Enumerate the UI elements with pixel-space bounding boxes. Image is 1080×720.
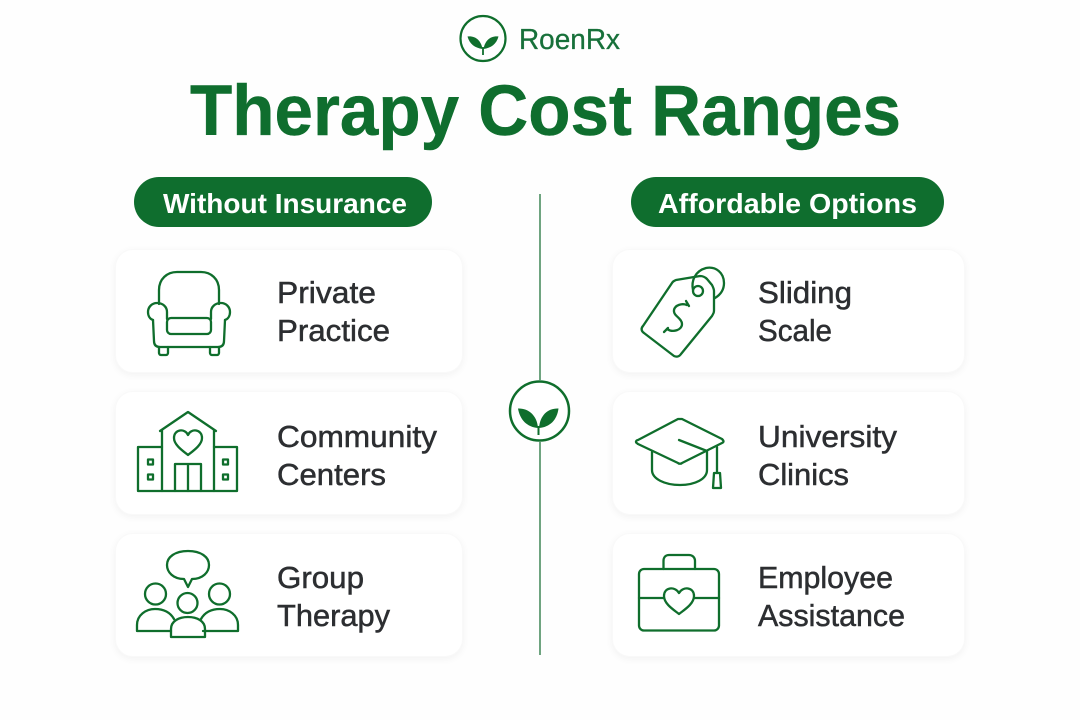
- panel: private practice card: [115, 249, 463, 373]
- panel: group therapy card: [115, 533, 463, 657]
- heading pill: affordable options: [631, 177, 944, 227]
- text: group therapy: Group: [277, 560, 364, 595]
- panel: employee assistance card: [612, 533, 965, 657]
- text: group therapy: Therapy: [277, 598, 390, 633]
- icon: group with speech bubble: [137, 551, 238, 637]
- text: university clinics: University: [758, 419, 897, 454]
- logo: RoenRx: [460, 16, 620, 61]
- text: employee assistance: Assistance: [758, 598, 905, 633]
- heading pill: affordable options: Affordable Options: [658, 188, 917, 219]
- icon: community building: [138, 412, 237, 491]
- title: Therapy Cost Ranges: [190, 72, 901, 151]
- panel: community centers card: [115, 391, 463, 515]
- icon: briefcase with heart: [639, 555, 719, 630]
- text: group therapy: [277, 560, 390, 633]
- icon: graduation cap: [636, 419, 724, 488]
- icon: armchair: [148, 272, 230, 355]
- text: university clinics: Clinics: [758, 457, 849, 492]
- text: community centers: Community: [277, 419, 438, 454]
- text: private practice: Private: [277, 275, 376, 310]
- text: community centers: [277, 419, 438, 492]
- logo: RoenRx: RoenRx: [519, 24, 620, 56]
- text: employee assistance: Employee: [758, 560, 893, 595]
- text: sliding scale: Sliding: [758, 275, 852, 310]
- text: private practice: Practice: [277, 313, 390, 348]
- center divider with leaf emblem: [510, 194, 569, 655]
- heading pill: without insurance: Without Insurance: [163, 188, 407, 219]
- icon: price tag: [642, 268, 724, 357]
- text: sliding scale: [758, 275, 852, 348]
- text: employee assistance: [758, 560, 905, 633]
- heading pill: without insurance: [134, 177, 432, 227]
- text: community centers: Centers: [277, 457, 386, 492]
- text: university clinics: [758, 419, 897, 492]
- panel: sliding scale card: [612, 249, 965, 373]
- text: sliding scale: Scale: [758, 313, 832, 348]
- text: private practice: [277, 275, 390, 348]
- panel: university clinics card: [612, 391, 965, 515]
